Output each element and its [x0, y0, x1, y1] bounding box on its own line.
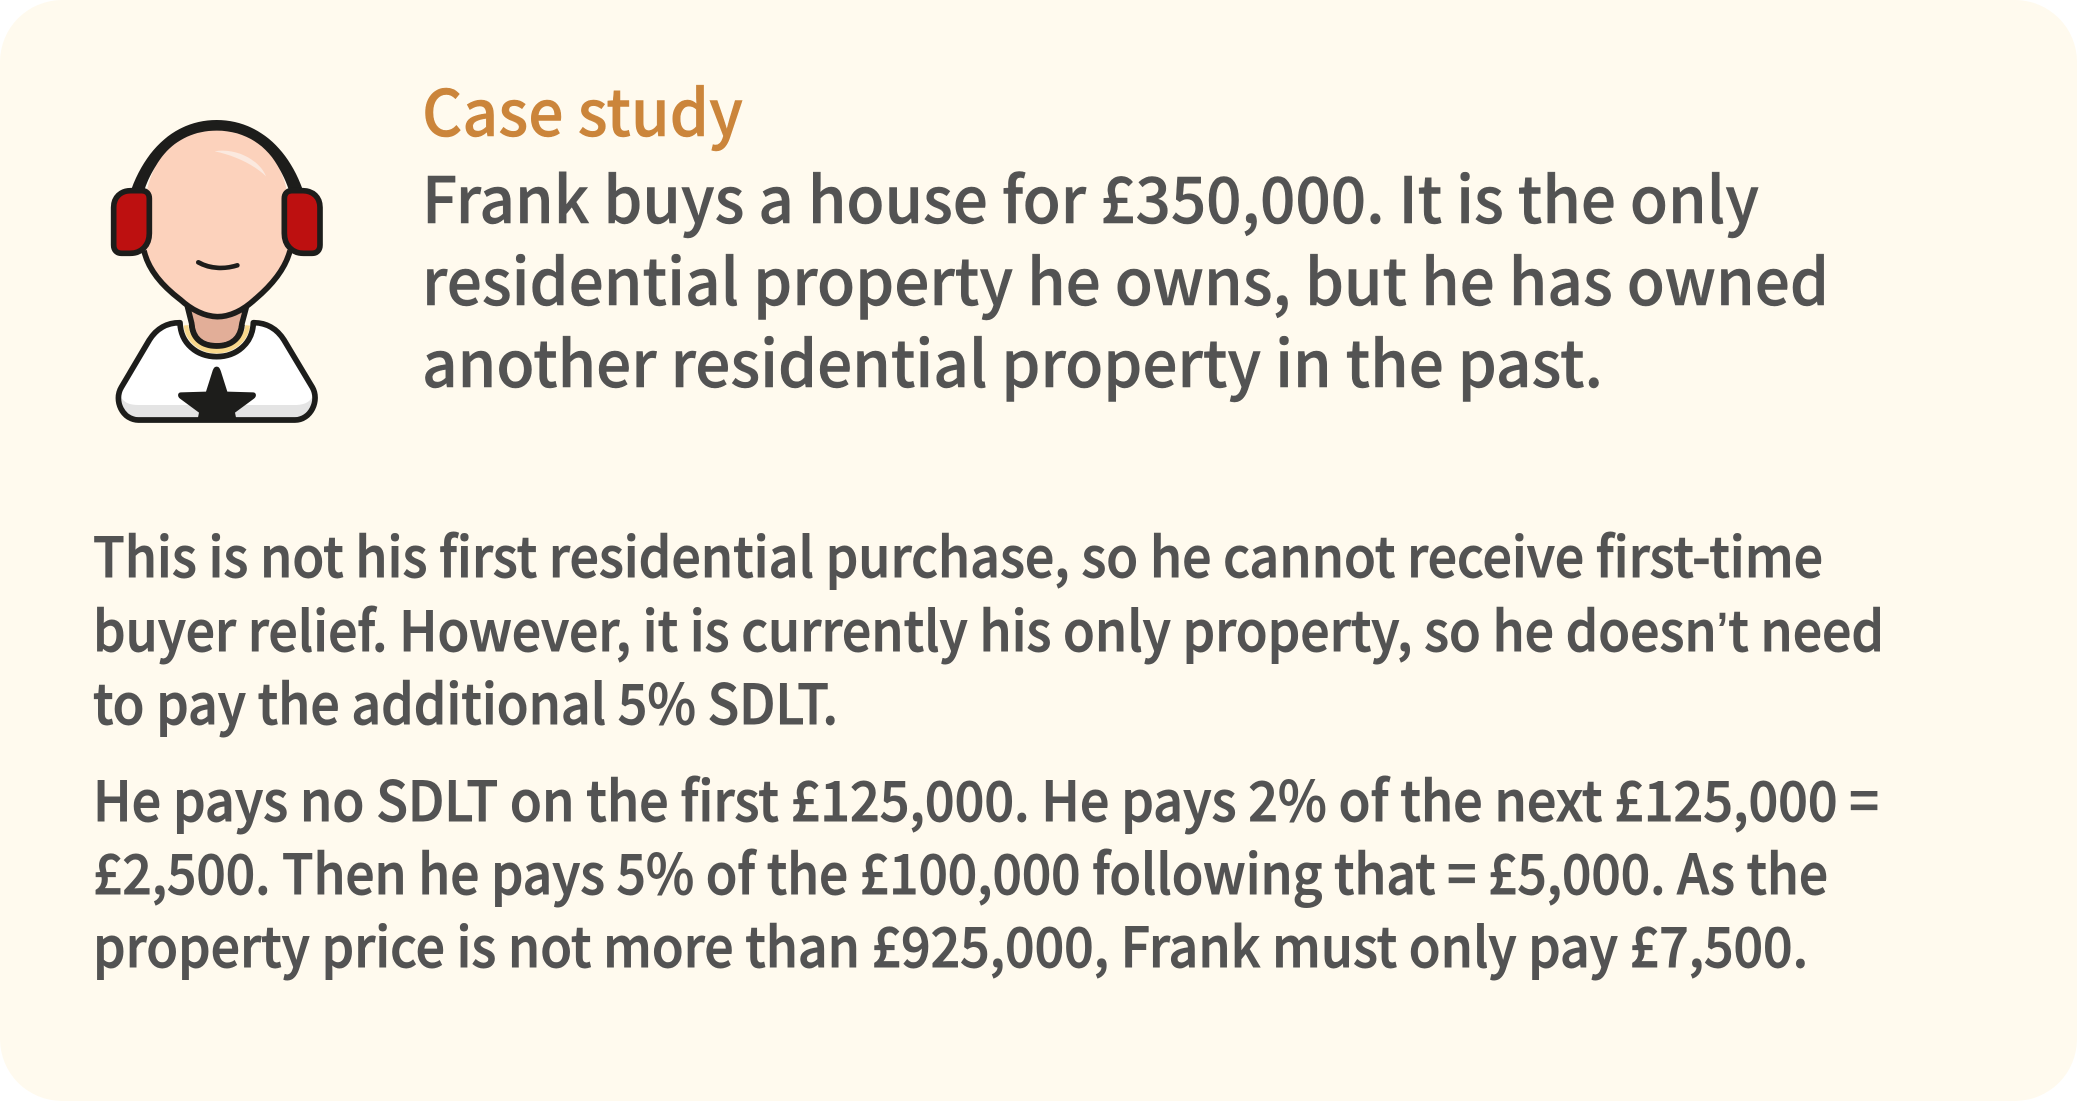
left ear cup [114, 191, 149, 253]
headband [131, 120, 303, 189]
text block: relief explanation: This is not his first residential purchase, so he cannot receive first-time [93, 513, 1823, 593]
shirt outline [118, 323, 315, 420]
shirt [119, 323, 315, 420]
right ear cup [284, 191, 320, 253]
collar [186, 325, 248, 351]
icon: person wearing red headphones [114, 120, 320, 421]
mouth [198, 262, 237, 268]
text block: relief explanation: to pay the additional 5% SDLT. [93, 660, 838, 740]
star [178, 367, 256, 421]
highlight [215, 151, 266, 176]
text block: scenario summary [422, 150, 1829, 406]
neck [187, 303, 247, 346]
neck collar line [192, 325, 242, 346]
head [145, 131, 289, 317]
heading: Case study: Case study [422, 63, 743, 155]
text block: scenario summary: Frank buys a house for £350,000. It is the only [422, 150, 1759, 242]
head outline [144, 251, 290, 317]
text block: SDLT calculation: He pays no SDLT on the first £125,000. He pays 2% of the next £125,000 = [93, 757, 1879, 837]
text block: SDLT calculation [93, 757, 1879, 983]
text block: scenario summary: residential property he owns, but he has owned [422, 232, 1829, 324]
text block: SDLT calculation: property price is not more than £925,000, Frank must only pay £7,500. [93, 903, 1808, 983]
text block: relief explanation: buyer relief. However, it is currently his only property, so he doesn’t need [93, 587, 1884, 667]
text block: SDLT calculation: £2,500. Then he pays 5% of the £100,000 following that = £5,000. As the [93, 830, 1828, 910]
text block: scenario summary: another residential property in the past. [422, 314, 1603, 406]
shirt shading [120, 396, 313, 419]
text block: relief explanation [93, 513, 1884, 740]
